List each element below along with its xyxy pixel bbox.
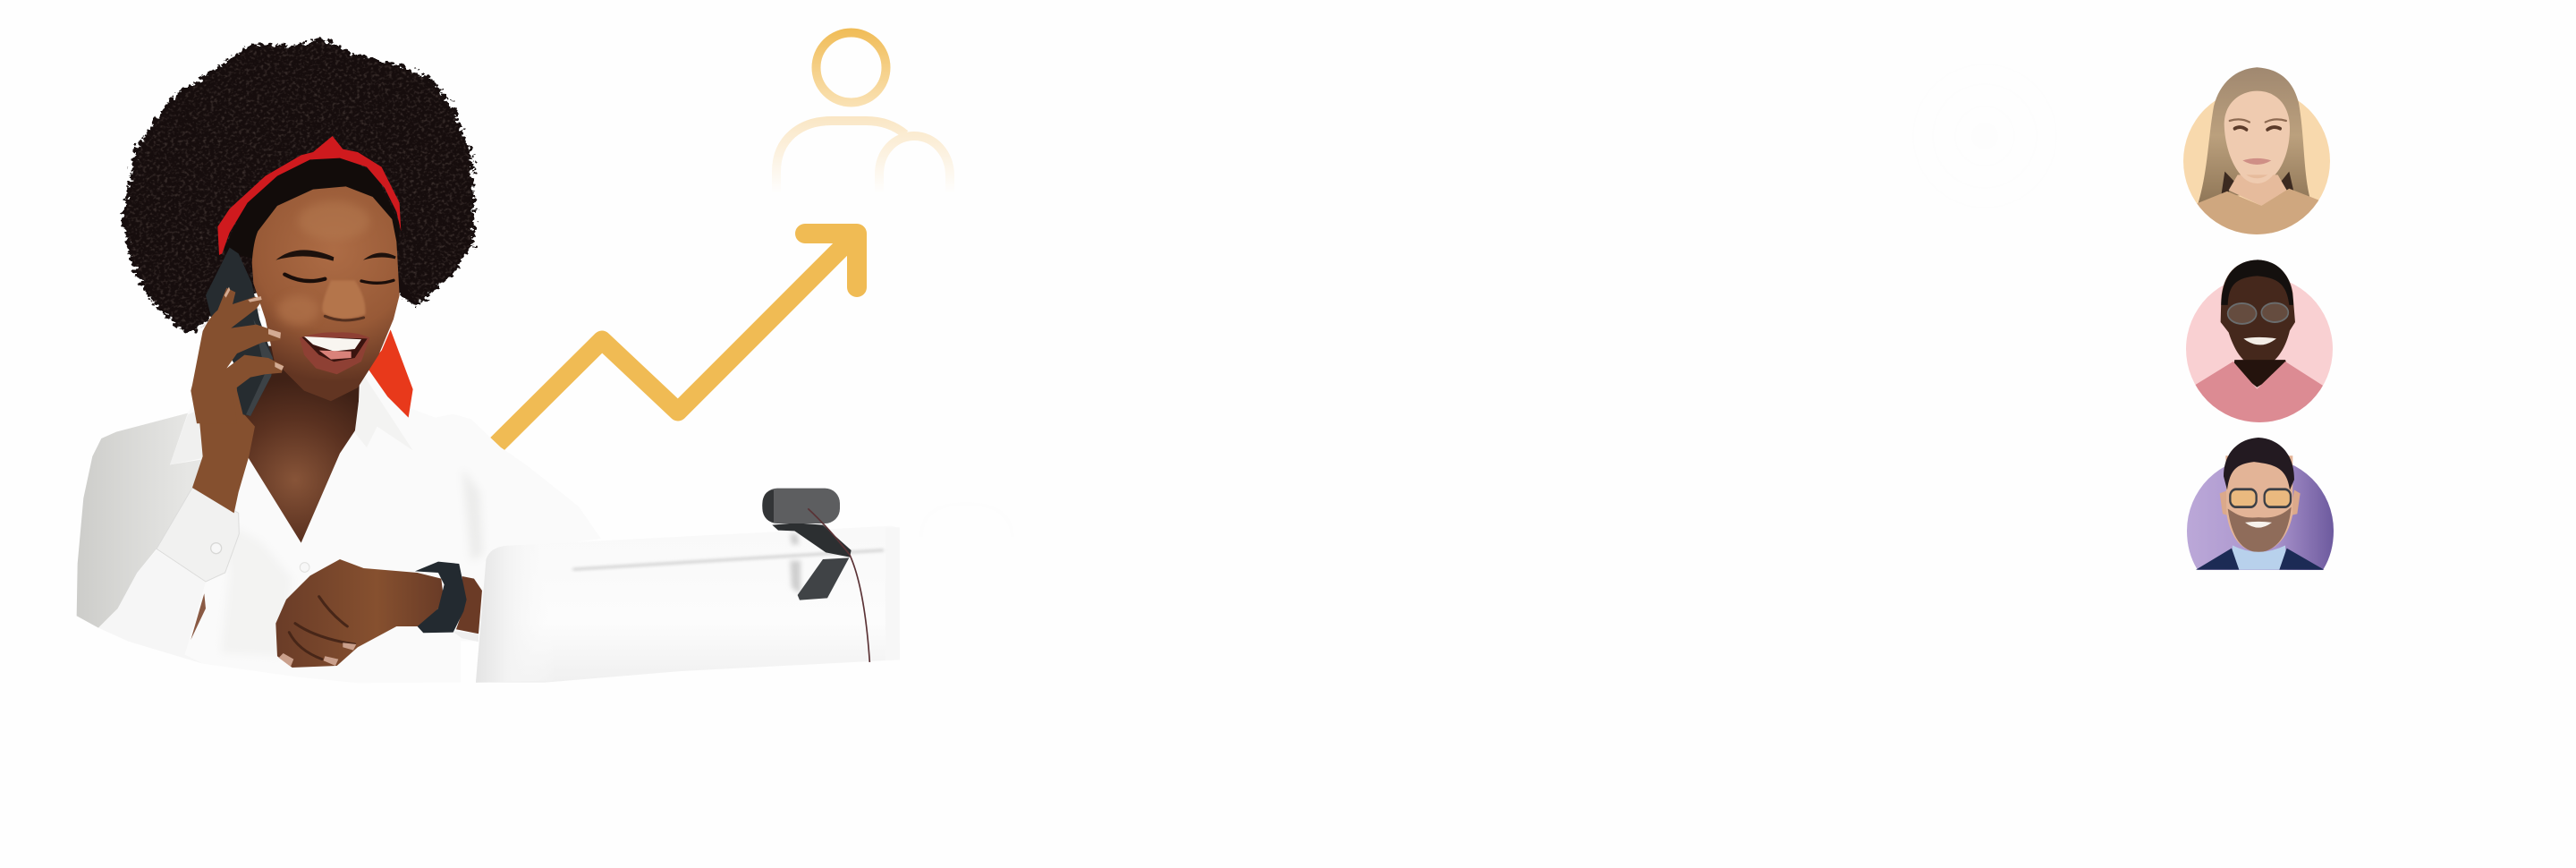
faint concentric rings bbox=[1913, 64, 2056, 208]
lips bbox=[2242, 158, 2271, 165]
avatar shirt bbox=[2195, 362, 2323, 422]
webcam body bbox=[762, 489, 840, 523]
shadow hair beside neck bbox=[2221, 172, 2294, 195]
webcam upper bracket bbox=[772, 523, 852, 557]
glasses bbox=[2228, 303, 2288, 324]
fingernails bbox=[225, 287, 284, 370]
hair bbox=[2221, 260, 2293, 305]
cheek highlight bbox=[277, 295, 319, 325]
webcam shadow bbox=[790, 534, 801, 593]
avatar: man in suit bbox=[2187, 438, 2334, 570]
eyes and brows bbox=[2230, 119, 2286, 130]
white shirt bbox=[77, 371, 601, 683]
far sleeve edge bbox=[452, 631, 479, 642]
webcam dark end bbox=[762, 489, 774, 523]
shirt button bbox=[300, 563, 309, 572]
avatar background bbox=[2186, 276, 2333, 422]
neck bbox=[2229, 174, 2287, 206]
collar left bbox=[170, 405, 208, 464]
phone bbox=[206, 248, 273, 416]
monitor bbox=[476, 526, 900, 683]
nose bbox=[322, 280, 365, 320]
smile bbox=[2243, 337, 2276, 345]
cuff button bbox=[211, 543, 222, 554]
chin bbox=[2233, 161, 2281, 183]
collar right bbox=[355, 373, 413, 450]
ears bbox=[2220, 490, 2301, 515]
face bbox=[252, 186, 400, 401]
neck bbox=[2233, 360, 2288, 387]
dark hair at forehead bbox=[224, 157, 400, 260]
phone edge bbox=[246, 319, 273, 416]
faint background arc bbox=[921, 504, 1013, 537]
hand holding phone bbox=[191, 288, 284, 423]
scarf tail bbox=[367, 329, 413, 418]
head bbox=[2221, 260, 2295, 368]
arm raised to phone bbox=[192, 382, 255, 513]
avatar background bbox=[2187, 457, 2334, 570]
sleeve lower bbox=[98, 550, 206, 664]
webcam lower bracket bbox=[798, 557, 849, 600]
brows bbox=[275, 250, 396, 261]
sleeve slit bbox=[191, 593, 206, 640]
mouth bbox=[300, 332, 369, 374]
smile bbox=[2245, 522, 2272, 528]
shirt and torso bbox=[77, 346, 601, 683]
face bbox=[2225, 455, 2292, 552]
icon: second person shoulders bbox=[879, 136, 950, 193]
right sleeve shade bbox=[462, 468, 483, 561]
hair bbox=[2224, 438, 2294, 490]
avatar background bbox=[2183, 88, 2330, 234]
webcam bbox=[762, 489, 869, 662]
hair bbox=[111, 32, 487, 343]
beard bbox=[2228, 507, 2292, 552]
icon: people outline bbox=[776, 32, 950, 193]
chest skin bbox=[233, 346, 360, 543]
forehead highlight bbox=[298, 201, 369, 240]
glasses bbox=[2230, 489, 2291, 507]
monitor left shading bbox=[476, 543, 555, 683]
hair bbox=[2198, 67, 2310, 204]
hand on wrist bbox=[275, 559, 445, 668]
avatar: man in pink shirt bbox=[2186, 260, 2333, 438]
smartwatch bbox=[415, 562, 467, 633]
eyes bbox=[284, 275, 394, 283]
canvas bbox=[77, 29, 2334, 683]
monitor edge bbox=[886, 527, 900, 660]
body shade bbox=[221, 519, 292, 656]
shirt collar bbox=[2232, 546, 2287, 570]
arrow: growth bbox=[483, 234, 857, 458]
suit bbox=[2196, 549, 2324, 570]
avatar: woman bbox=[2183, 67, 2330, 234]
icon: person shoulders bbox=[776, 121, 905, 193]
monitor groove bbox=[572, 550, 884, 569]
wrist beyond watch bbox=[456, 576, 482, 634]
headband bbox=[217, 136, 401, 255]
cuff bbox=[157, 488, 239, 582]
fingernails bbox=[279, 642, 356, 667]
icon: person head bbox=[816, 32, 886, 102]
face bbox=[2224, 91, 2290, 183]
finger shadows bbox=[289, 597, 355, 660]
photo: woman on phone bbox=[77, 32, 900, 683]
head and hand bbox=[191, 136, 401, 423]
webcam cable bbox=[808, 508, 869, 662]
grey left sleeve bbox=[77, 413, 203, 628]
avatar shirt bbox=[2197, 188, 2318, 234]
